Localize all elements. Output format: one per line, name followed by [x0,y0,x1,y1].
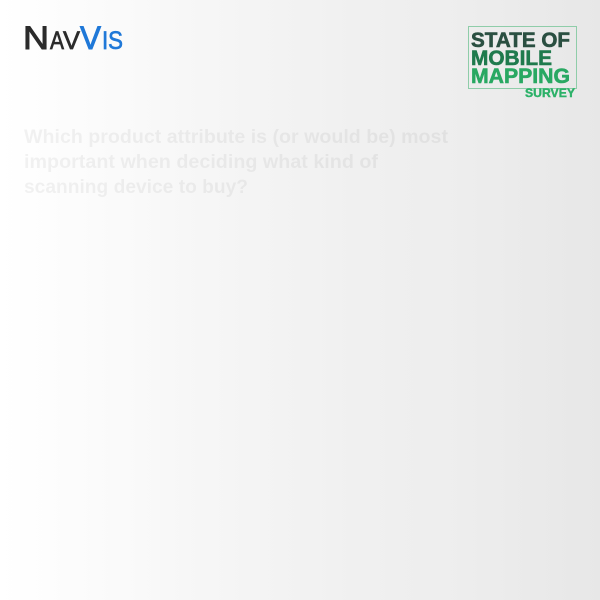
question heading: important when deciding what kind of [24,152,379,173]
badge: State of Mobile Mapping Survey: MOBILE [471,47,552,70]
question heading: Which product attribute is (or would be) most [24,127,449,148]
badge: State of Mobile Mapping Survey: SURVEY [525,88,575,100]
logo: NavVis [23,22,123,54]
badge: State of Mobile Mapping Survey [468,26,577,100]
question heading: scanning device to buy? [24,177,248,198]
badge: State of Mobile Mapping Survey: MAPPING [471,65,570,88]
badge: State of Mobile Mapping Survey: STATE OF [471,29,570,52]
question heading [24,127,449,198]
